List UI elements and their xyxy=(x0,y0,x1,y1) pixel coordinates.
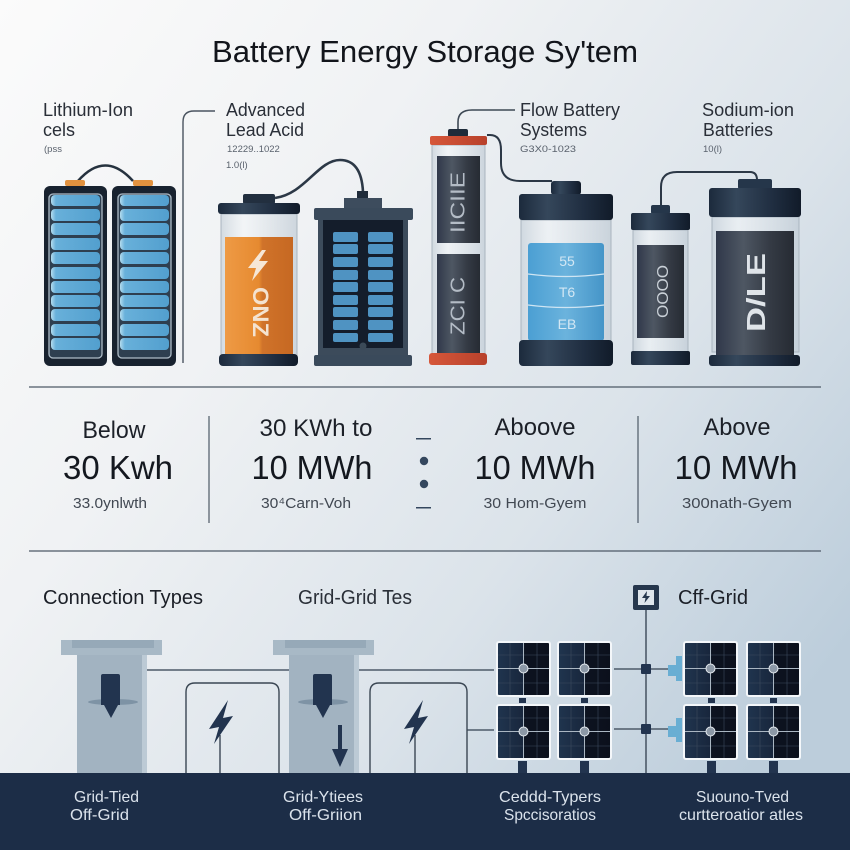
label: sodium-ion: Batteries xyxy=(703,120,773,140)
flow battery tank: EB xyxy=(558,316,576,332)
sodium cable xyxy=(661,172,757,205)
separator xyxy=(208,416,210,523)
capacity: above 10 mwh xyxy=(674,414,798,512)
icon: meter box xyxy=(633,585,659,610)
small sodium cylinder xyxy=(631,205,690,365)
icon: bolt xyxy=(248,250,268,281)
large sodium cylinder: D/LE xyxy=(741,253,771,332)
flow battery tank: 55 xyxy=(559,253,575,269)
label: advanced lead acid xyxy=(226,100,305,171)
label: lithium-ion: Lithium-Ion xyxy=(43,100,133,120)
pillar: grid tied xyxy=(61,640,162,773)
footer label 3: Ceddd-Typers xyxy=(499,789,601,806)
label: sodium-ion xyxy=(702,100,794,155)
lithium-ion battery pack xyxy=(44,166,176,366)
heading: grid-grid: Grid-Grid Tes xyxy=(298,587,412,609)
divider xyxy=(29,386,821,388)
capacity: 30 kwh to 10 mwh: 30 KWh to xyxy=(260,415,372,442)
leader line: flow battery xyxy=(458,110,515,129)
label: sodium-ion: 10(l) xyxy=(703,144,722,155)
label: advanced lead acid: Advanced xyxy=(226,100,305,120)
label: lithium-ion: cels xyxy=(43,120,75,140)
title: Battery Energy Storage Sy'tem xyxy=(212,34,638,69)
icon: down arrow xyxy=(101,674,120,718)
divider xyxy=(29,550,821,552)
capacity: above 10 mwh: 300nath-Gyem xyxy=(682,495,792,512)
capacity: below 30 kwh: 33.0ynlwth xyxy=(73,495,147,512)
label: advanced lead acid: Lead Acid xyxy=(226,120,304,140)
solar array left xyxy=(497,642,611,773)
tube markings xyxy=(447,172,469,335)
label: flow battery: Flow Battery xyxy=(520,100,620,120)
footer label 1 xyxy=(70,789,139,824)
footer label 3: Spccisoratios xyxy=(504,807,596,824)
capacity: aboove 10 mwh xyxy=(474,414,596,512)
label: flow battery: Systems xyxy=(520,120,587,140)
solar array right xyxy=(684,642,800,773)
large sodium cylinder xyxy=(709,179,801,366)
junction nodes xyxy=(641,664,651,734)
wiring xyxy=(147,610,672,773)
icon: bolt xyxy=(404,700,428,744)
label: lithium-ion: (pss xyxy=(44,144,62,155)
icon: small arrow xyxy=(332,725,348,767)
heading: off-grid: Cff-Grid xyxy=(678,587,748,609)
pillar: grid tied 2 xyxy=(273,640,374,773)
footer label 2 xyxy=(283,789,363,824)
colon separator xyxy=(416,438,431,508)
capacity: below 30 kwh: 30 Kwh xyxy=(63,449,173,486)
footer label 2: Off-Griion xyxy=(289,807,362,824)
switch box 2 xyxy=(370,683,467,773)
footer label 4 xyxy=(679,789,803,824)
footer label 2: Grid-Ytiees xyxy=(283,789,363,806)
lead acid cylinder xyxy=(218,194,300,366)
icon: bolt xyxy=(209,700,233,744)
label: advanced lead acid: 1.0(l) xyxy=(226,160,248,171)
footer label 3 xyxy=(499,789,601,824)
capacity: below 30 kwh xyxy=(63,417,173,512)
capacity: aboove 10 mwh: 30 Hom-Gyem xyxy=(484,495,586,512)
flow battery tank xyxy=(519,181,613,366)
lead acid cable xyxy=(275,160,363,198)
label: flow battery xyxy=(520,100,620,155)
footer label 1: Off-Grid xyxy=(70,807,129,824)
icon: down arrow xyxy=(313,674,332,718)
capacity: 30 kwh to 10 mwh xyxy=(252,415,372,512)
blue connectors xyxy=(668,656,682,742)
footer band xyxy=(0,773,850,850)
tall red-capped tube xyxy=(429,129,487,365)
capacity: aboove 10 mwh: 10 MWh xyxy=(474,449,596,486)
footer label 4: curtteroatior atles xyxy=(679,807,803,824)
capacity: 30 kwh to 10 mwh: 10 MWh xyxy=(252,449,372,486)
leader line: lead acid xyxy=(183,111,215,363)
tube markings: IICIIE xyxy=(447,172,469,233)
small sodium cylinder: OOOO xyxy=(653,265,670,318)
heading: connection types: Connection Types xyxy=(43,587,203,609)
footer label 1: Grid-Tied xyxy=(74,789,139,806)
footer label 4: Suouno-Tved xyxy=(696,789,789,806)
lead acid cell rack xyxy=(314,191,413,366)
capacity: above 10 mwh: Above xyxy=(704,414,770,441)
label: sodium-ion: Sodium-ion xyxy=(702,100,794,120)
label: advanced lead acid: 12229..1022 xyxy=(227,144,280,155)
tube markings: ZCI C xyxy=(447,277,469,335)
battery marking: ONZ xyxy=(248,287,273,337)
flow battery tank: T6 xyxy=(559,284,575,300)
capacity: 30 kwh to 10 mwh: 30⁴Carn-Voh xyxy=(261,495,351,512)
capacity: aboove 10 mwh: Aboove xyxy=(494,414,576,441)
flow cable xyxy=(487,135,552,181)
label: flow battery: G3X0-1023 xyxy=(520,144,576,155)
label: lithium-ion xyxy=(43,100,133,155)
switch box 1 xyxy=(186,683,279,773)
capacity: below 30 kwh: Below xyxy=(82,417,146,444)
capacity: above 10 mwh: 10 MWh xyxy=(674,449,798,486)
separator xyxy=(637,416,639,523)
